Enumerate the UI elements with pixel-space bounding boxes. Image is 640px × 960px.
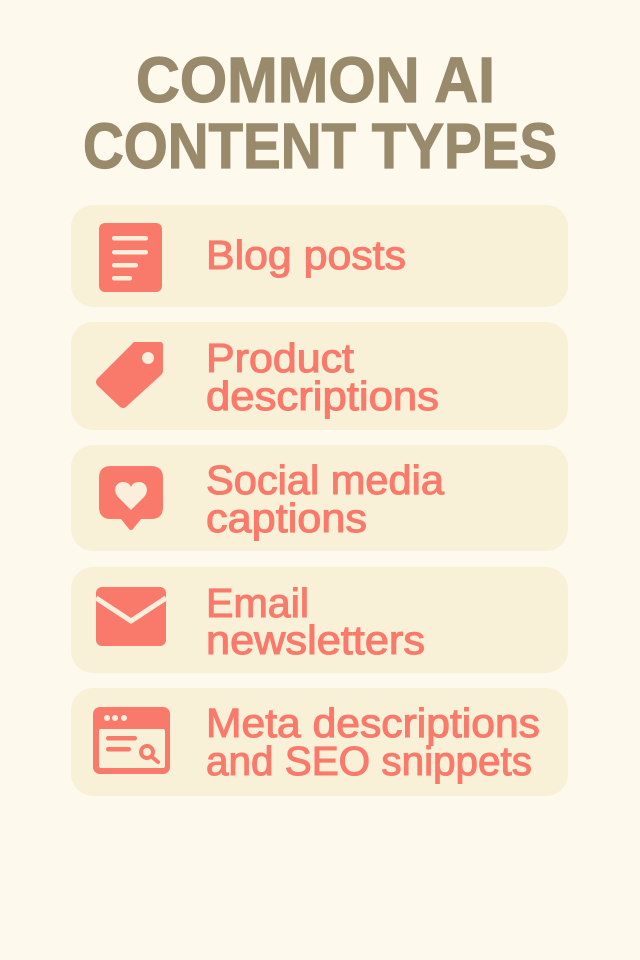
title: COMMON AI [136, 44, 495, 116]
label: product descriptions: descriptions [206, 373, 439, 419]
icon: speech bubble with heart [99, 466, 163, 530]
label: email newsletters: Email [206, 580, 309, 626]
icon: tag hole [142, 352, 154, 364]
label: meta descriptions and SEO snippets: Meta descriptions [206, 700, 540, 746]
label: social media captions: captions [206, 495, 367, 541]
label: email newsletters [206, 580, 425, 663]
label: meta descriptions and SEO snippets [206, 700, 540, 784]
label: product descriptions: Product [206, 335, 355, 381]
panel: product descriptions [71, 322, 568, 430]
label: product descriptions [206, 335, 439, 419]
label: social media captions [206, 457, 444, 541]
label: social media captions: Social media [206, 457, 444, 503]
panel: blog posts [71, 205, 568, 307]
label: email newsletters: newsletters [206, 617, 425, 663]
panel: social media captions [71, 445, 568, 551]
icon: envelope [96, 587, 166, 646]
icon: price tag [96, 342, 163, 408]
icon: browser window with magnifier [93, 707, 170, 774]
title [83, 44, 557, 182]
label: meta descriptions and SEO snippets: and SEO snippets [206, 738, 532, 784]
panel: meta descriptions and SEO snippets [71, 688, 568, 796]
label: blog posts: Blog posts [206, 232, 406, 278]
title: CONTENT TYPES [83, 110, 557, 182]
panel: email newsletters [71, 567, 568, 673]
icon: document [99, 223, 162, 292]
